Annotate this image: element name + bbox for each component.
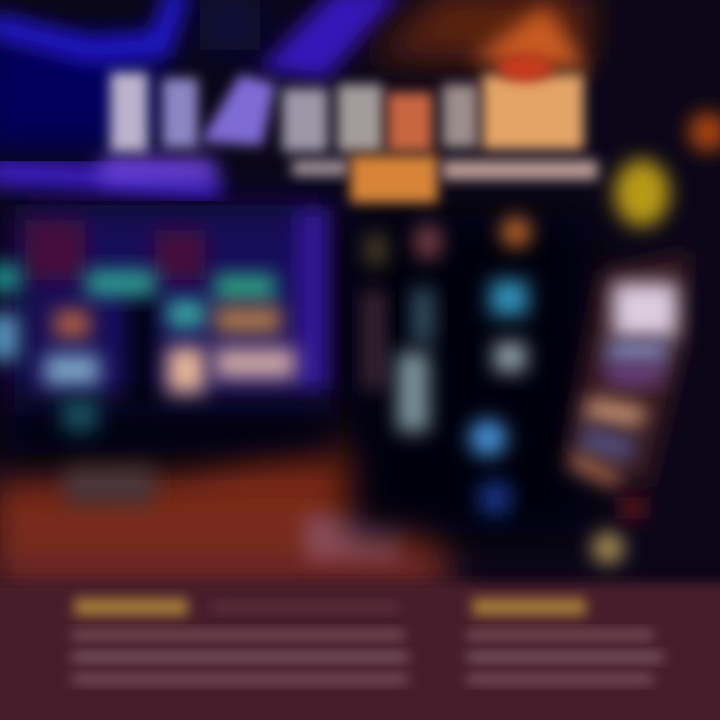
panel: right dark slot machines	[350, 215, 590, 535]
panel: bright slot machine right	[565, 112, 720, 564]
heading: right column	[472, 598, 586, 616]
heading: left column	[74, 598, 188, 616]
floor	[0, 430, 450, 600]
icon: gold coin	[592, 532, 624, 564]
text block: left column	[72, 602, 408, 684]
machine column 3	[469, 217, 531, 514]
panel: bottom band	[0, 582, 720, 720]
panel: left slot machine bank	[0, 205, 340, 455]
machine screen left	[44, 270, 156, 432]
machine column 1	[364, 232, 388, 390]
machine screen centre	[167, 274, 296, 393]
icon: yellow lamp	[614, 159, 670, 227]
machine column 2	[397, 224, 442, 432]
subtitle	[292, 155, 598, 203]
text block: right column	[467, 630, 663, 684]
machine screen far left	[0, 264, 20, 360]
ceiling glow and neon lines	[0, 0, 590, 190]
title	[100, 54, 598, 203]
